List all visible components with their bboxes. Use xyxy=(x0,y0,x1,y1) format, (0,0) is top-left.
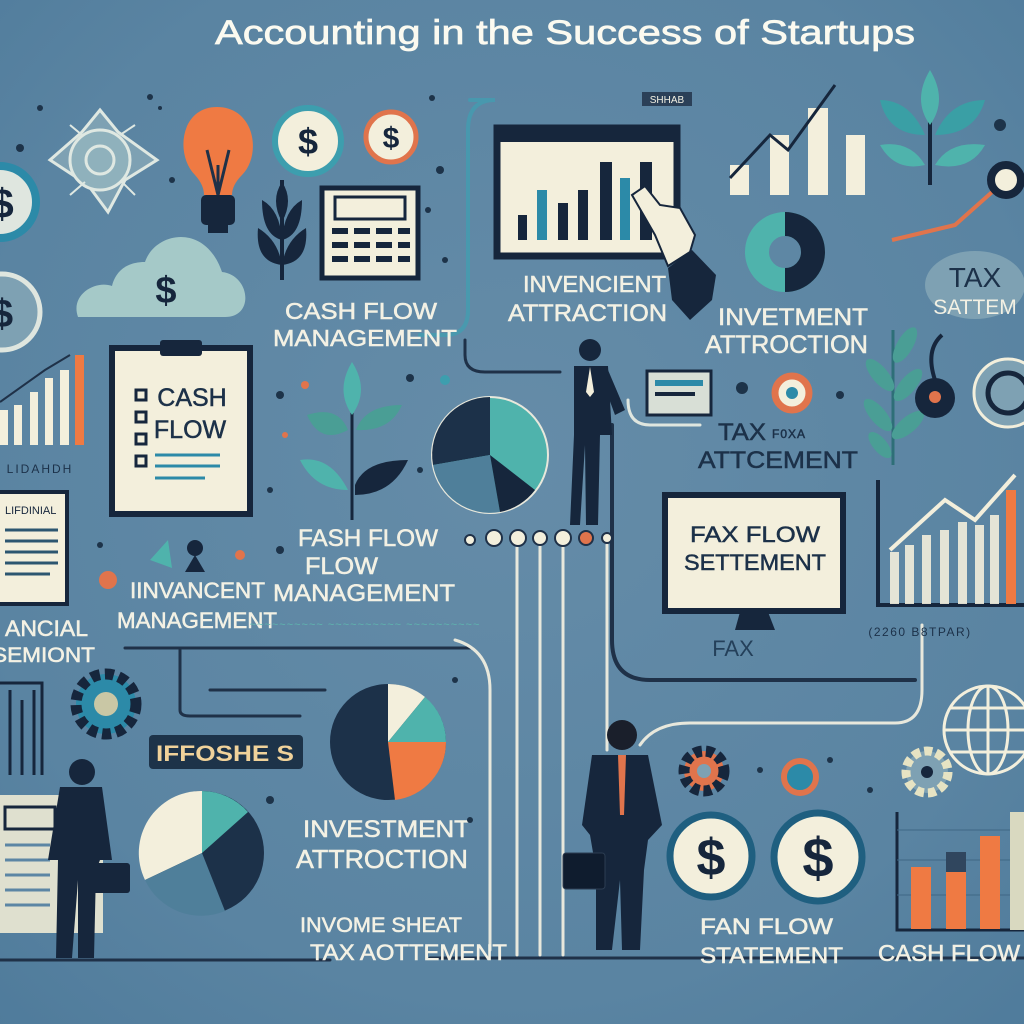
label: invome sheat xyxy=(300,914,507,965)
icon: dollar coin 1 xyxy=(275,108,341,174)
label: invancent management xyxy=(117,578,277,633)
label: invome sheat: INVOME SHEAT xyxy=(300,914,462,937)
icon: donut chart xyxy=(757,224,813,280)
icon: dark orange flower xyxy=(915,335,955,418)
scattered specks xyxy=(16,94,1006,823)
icon: dollar coin 2: $ xyxy=(383,122,400,155)
panel: browser chart xyxy=(497,128,677,256)
icon: clipboard cash flow xyxy=(112,340,250,514)
icon: dollar coin 2 xyxy=(366,112,416,162)
caption: green small: ~~~~~~~~~~ ~~~~~~~~~~ ~~~~~~~~~~ xyxy=(250,619,480,631)
tag: ifposhes: IFFOSHE S xyxy=(156,741,294,766)
caption: right small: (2260 B8TPAR) xyxy=(868,625,972,639)
label: cash flow management xyxy=(273,298,457,351)
label: tax acctement xyxy=(698,419,858,474)
icon: large dollar coin 2 xyxy=(774,813,862,901)
label: tax acctement: ATTCEMENT xyxy=(698,447,858,474)
icon: monitor: FAX FLOW xyxy=(690,522,820,547)
icon: dollar coin left lower xyxy=(0,274,40,350)
label: fash flow management: FASH FLOW xyxy=(298,525,438,552)
tag: ifposhes xyxy=(149,735,303,769)
icon: dark plant xyxy=(258,180,306,280)
icon: gear crystal xyxy=(50,110,157,212)
label: tax satement xyxy=(925,251,1024,319)
icon: orange ring xyxy=(775,376,809,410)
icon: calculator xyxy=(322,188,418,278)
connector nodes xyxy=(465,530,612,546)
label: financial statement: ANCIAL xyxy=(5,616,88,641)
label: tax acctement: TAX xyxy=(718,419,766,446)
icon: globe xyxy=(944,686,1024,774)
label: invome sheat: TAX AOTTEMENT xyxy=(310,940,507,965)
icon: leaf branch right xyxy=(859,324,928,465)
label: cash flow management: CASH FLOW xyxy=(285,298,438,324)
icon: report lower left xyxy=(0,795,103,933)
chart: left lower bars xyxy=(0,683,42,775)
icon: clipboard cash flow: FLOW xyxy=(154,416,227,444)
chart: top right bars xyxy=(730,85,865,195)
label: cash flow management: MANAGEMENT xyxy=(273,325,457,351)
label: invancent management: MANAGEMENT xyxy=(117,608,277,633)
chart: lower pie xyxy=(139,791,264,916)
label: investment attraction lower xyxy=(296,816,470,874)
icon: dark gear xyxy=(684,751,724,791)
figure: businessman center xyxy=(563,720,662,950)
icon: center green plant xyxy=(300,362,408,520)
label: investment attraction lower: ATTROCTION xyxy=(296,844,468,874)
label: invencient attraction: INVENCIENT xyxy=(523,271,666,297)
icon: light bulb xyxy=(183,107,253,233)
small decorative person icons xyxy=(99,540,245,589)
label: financial statement xyxy=(0,616,95,667)
label: fash flow management xyxy=(273,525,455,607)
icon: report left xyxy=(0,492,67,604)
icon: gear teal xyxy=(76,674,136,734)
title: Accounting in the Success of Startups xyxy=(215,14,915,52)
figure: businessman left xyxy=(48,759,130,958)
figure: businessman top xyxy=(570,339,625,525)
icon: large dollar coin 1 xyxy=(670,815,752,897)
icon: cloud xyxy=(76,237,245,317)
label: fax: FAX xyxy=(712,636,754,661)
label: tax acctement: F0XA xyxy=(772,427,806,441)
label: investment attraction top xyxy=(705,304,868,359)
label: investment attraction top: INVETMENT xyxy=(718,304,868,331)
icon: pointing hand xyxy=(632,186,716,320)
label: fan flow statement: STATEMENT xyxy=(700,943,843,968)
label: left caption: LIDAHDH xyxy=(7,462,73,476)
chart: lower right bars xyxy=(897,812,1024,930)
label: fash flow management: MANAGEMENT xyxy=(273,580,455,607)
label: invencient attraction xyxy=(508,271,667,327)
icon: large dollar coin 2: $ xyxy=(802,826,834,889)
icon: monitor: SETTEMENT xyxy=(684,550,826,575)
chart: center pie xyxy=(432,397,548,513)
icon: report left: LIFDINIAL xyxy=(5,505,56,517)
icon: top right plant xyxy=(880,70,985,185)
label: invencient attraction: ATTRACTION xyxy=(508,300,667,327)
icon: clock right xyxy=(974,359,1024,427)
small tag: SHHAB xyxy=(650,95,685,106)
small tag xyxy=(642,92,692,106)
icon: large dollar coin 1: $ xyxy=(697,829,726,887)
chart: left bars xyxy=(0,355,84,445)
label: investment attraction top: ATTROCTION xyxy=(705,331,868,359)
icon: monitor xyxy=(665,495,843,630)
label: investment attraction lower: INVESTMENT xyxy=(303,816,470,843)
icon: orange arrow with target xyxy=(892,165,1021,240)
icon: dollar coin 1: $ xyxy=(298,121,318,162)
label: fan flow statement: FAN FLOW xyxy=(700,914,833,939)
label: tax satement: SATTEM xyxy=(933,296,1017,319)
label: invancent management: IINVANCENT xyxy=(130,578,265,603)
label: tax satement: TAX xyxy=(949,262,1002,293)
label: fash flow management: FLOW xyxy=(305,553,378,580)
chart: middle pie xyxy=(330,684,446,800)
icon: cloud: $ xyxy=(155,270,177,312)
icon: cream gear xyxy=(906,751,948,793)
label: cash flow: CASH FLOW xyxy=(878,940,1020,966)
small monitor card xyxy=(647,371,711,415)
label: fan flow statement xyxy=(700,914,843,968)
icon: orange gear xyxy=(784,761,816,793)
icon: clipboard cash flow: CASH xyxy=(157,384,227,412)
chart: right growth xyxy=(878,475,1024,605)
icon: dollar coin left xyxy=(0,166,36,238)
